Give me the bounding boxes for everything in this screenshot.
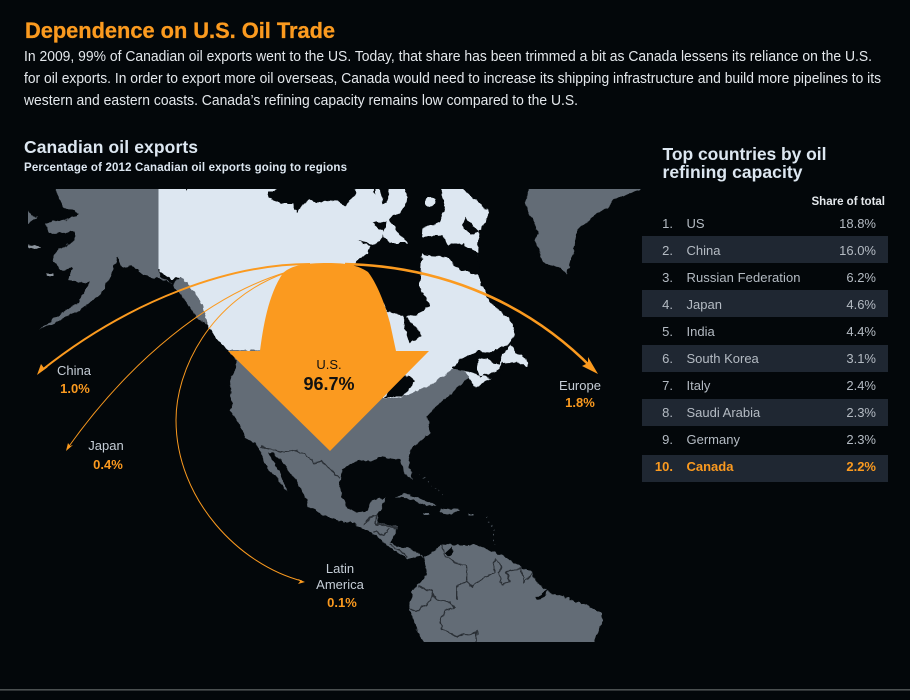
row 8: 2.3%: [846, 405, 876, 420]
label: U.S.: [303, 357, 355, 394]
intro text block: western and eastern coasts. Canada’s refining capacity remains low compared to the U.S.: [23, 93, 578, 109]
row 3: 6.2%: [846, 270, 876, 285]
label: Europe: [559, 378, 601, 410]
row 10: Canada: [686, 459, 734, 474]
row 6: [662, 351, 876, 366]
row 5: [662, 324, 876, 339]
row 5: 5.: [662, 324, 673, 339]
Alaska: [40, 180, 173, 330]
label: China: China: [57, 363, 92, 378]
label: Latin America: America: [316, 577, 365, 592]
arrow: U.S. 96.7%: [228, 263, 429, 451]
United States, Mexico and Central America: [228, 340, 468, 559]
arrow: China: [37, 264, 310, 375]
label: China: 1.0%: [60, 381, 90, 396]
label: Latin America: 0.1%: [327, 595, 357, 610]
row 6: 3.1%: [846, 351, 876, 366]
row 1: 18.8%: [839, 216, 876, 231]
intro text block: In 2009, 99% of Canadian oil exports went to the US. Today, that share has been trimmed a bit as Canada lessens its reliance on the U.S.: [24, 49, 872, 65]
label: China: [57, 363, 92, 396]
arrow: Europe: [345, 264, 598, 374]
row 9: 2.3%: [846, 432, 876, 447]
Arctic channels: [180, 180, 513, 397]
intro text block: [23, 49, 881, 109]
row 3: [662, 270, 876, 285]
table heading: Top countries by oil: [662, 144, 826, 164]
map heading: Percentage of 2012 Canadian oil exports going to regions: [24, 162, 347, 174]
arrow: Japan: [66, 272, 287, 451]
Great Lakes: [385, 375, 415, 397]
arrow: Latin America: [176, 273, 305, 584]
row 8: 8.: [662, 405, 673, 420]
row 8: [662, 405, 876, 420]
row 9: [662, 432, 876, 447]
Canada: [159, 180, 515, 398]
row 6: 6.: [662, 351, 673, 366]
Greenland: [525, 180, 660, 275]
row 1: US: [686, 216, 705, 231]
row 6: South Korea: [686, 351, 760, 366]
row 2: 2.: [662, 243, 673, 258]
label: Europe: 1.8%: [565, 395, 595, 410]
label: U.S.: 96.7%: [303, 374, 355, 394]
row 4: 4.: [662, 297, 673, 312]
row 8: Saudi Arabia: [686, 405, 761, 420]
map heading: [24, 137, 347, 174]
label: Japan: Japan: [88, 438, 124, 453]
row 7: Italy: [686, 378, 711, 393]
row 3: Russian Federation: [686, 270, 800, 285]
row 4: Japan: [686, 297, 722, 312]
row 10: 2.2%: [846, 459, 876, 474]
country borders: [260, 447, 533, 648]
intro text block: for oil exports. In order to export more oil overseas, Canada would need to increase its shipping infrastructure and build more pipelines to its: [24, 71, 881, 87]
row 7: 2.4%: [846, 378, 876, 393]
map of the Americas: [20, 180, 660, 655]
table row stripes: [642, 236, 888, 482]
label: Latin America: Latin: [326, 561, 354, 576]
label: Latin America: [316, 561, 365, 610]
Caribbean islands: [395, 493, 473, 515]
Canadian islands: [383, 197, 528, 368]
row 2: 16.0%: [839, 243, 876, 258]
row 7: 7.: [662, 378, 673, 393]
row 9: 9.: [662, 432, 673, 447]
Gulf of St. Lawrence: [452, 339, 513, 378]
label: U.S.: U.S.: [316, 357, 342, 372]
map heading: Canadian oil exports: [24, 137, 198, 157]
row 7: [662, 378, 876, 393]
row 2: China: [686, 243, 721, 258]
label: Japan: [88, 438, 124, 472]
table: top countries by refining capacity: [642, 196, 888, 482]
South America: [409, 544, 603, 642]
row 10: [655, 459, 876, 474]
row 9: Germany: [686, 432, 740, 447]
row 3: 3.: [662, 270, 673, 285]
row 4: [662, 297, 876, 312]
title: Dependence on U.S. Oil Trade: [25, 18, 335, 43]
label: Europe: Europe: [559, 378, 601, 393]
Alaska panhandle: [172, 277, 207, 325]
row 4: 4.6%: [846, 297, 876, 312]
table heading: refining capacity: [662, 162, 803, 182]
row 10: 10.: [655, 459, 673, 474]
row 1: [662, 216, 876, 231]
table heading: [662, 144, 826, 182]
row 2: [662, 243, 876, 258]
label: Japan: 0.4%: [93, 457, 123, 472]
column header: Share of total: [812, 196, 885, 208]
row 1: 1.: [662, 216, 673, 231]
Hudson Bay: [353, 180, 480, 343]
row 5: 4.4%: [846, 324, 876, 339]
row 5: India: [686, 324, 715, 339]
